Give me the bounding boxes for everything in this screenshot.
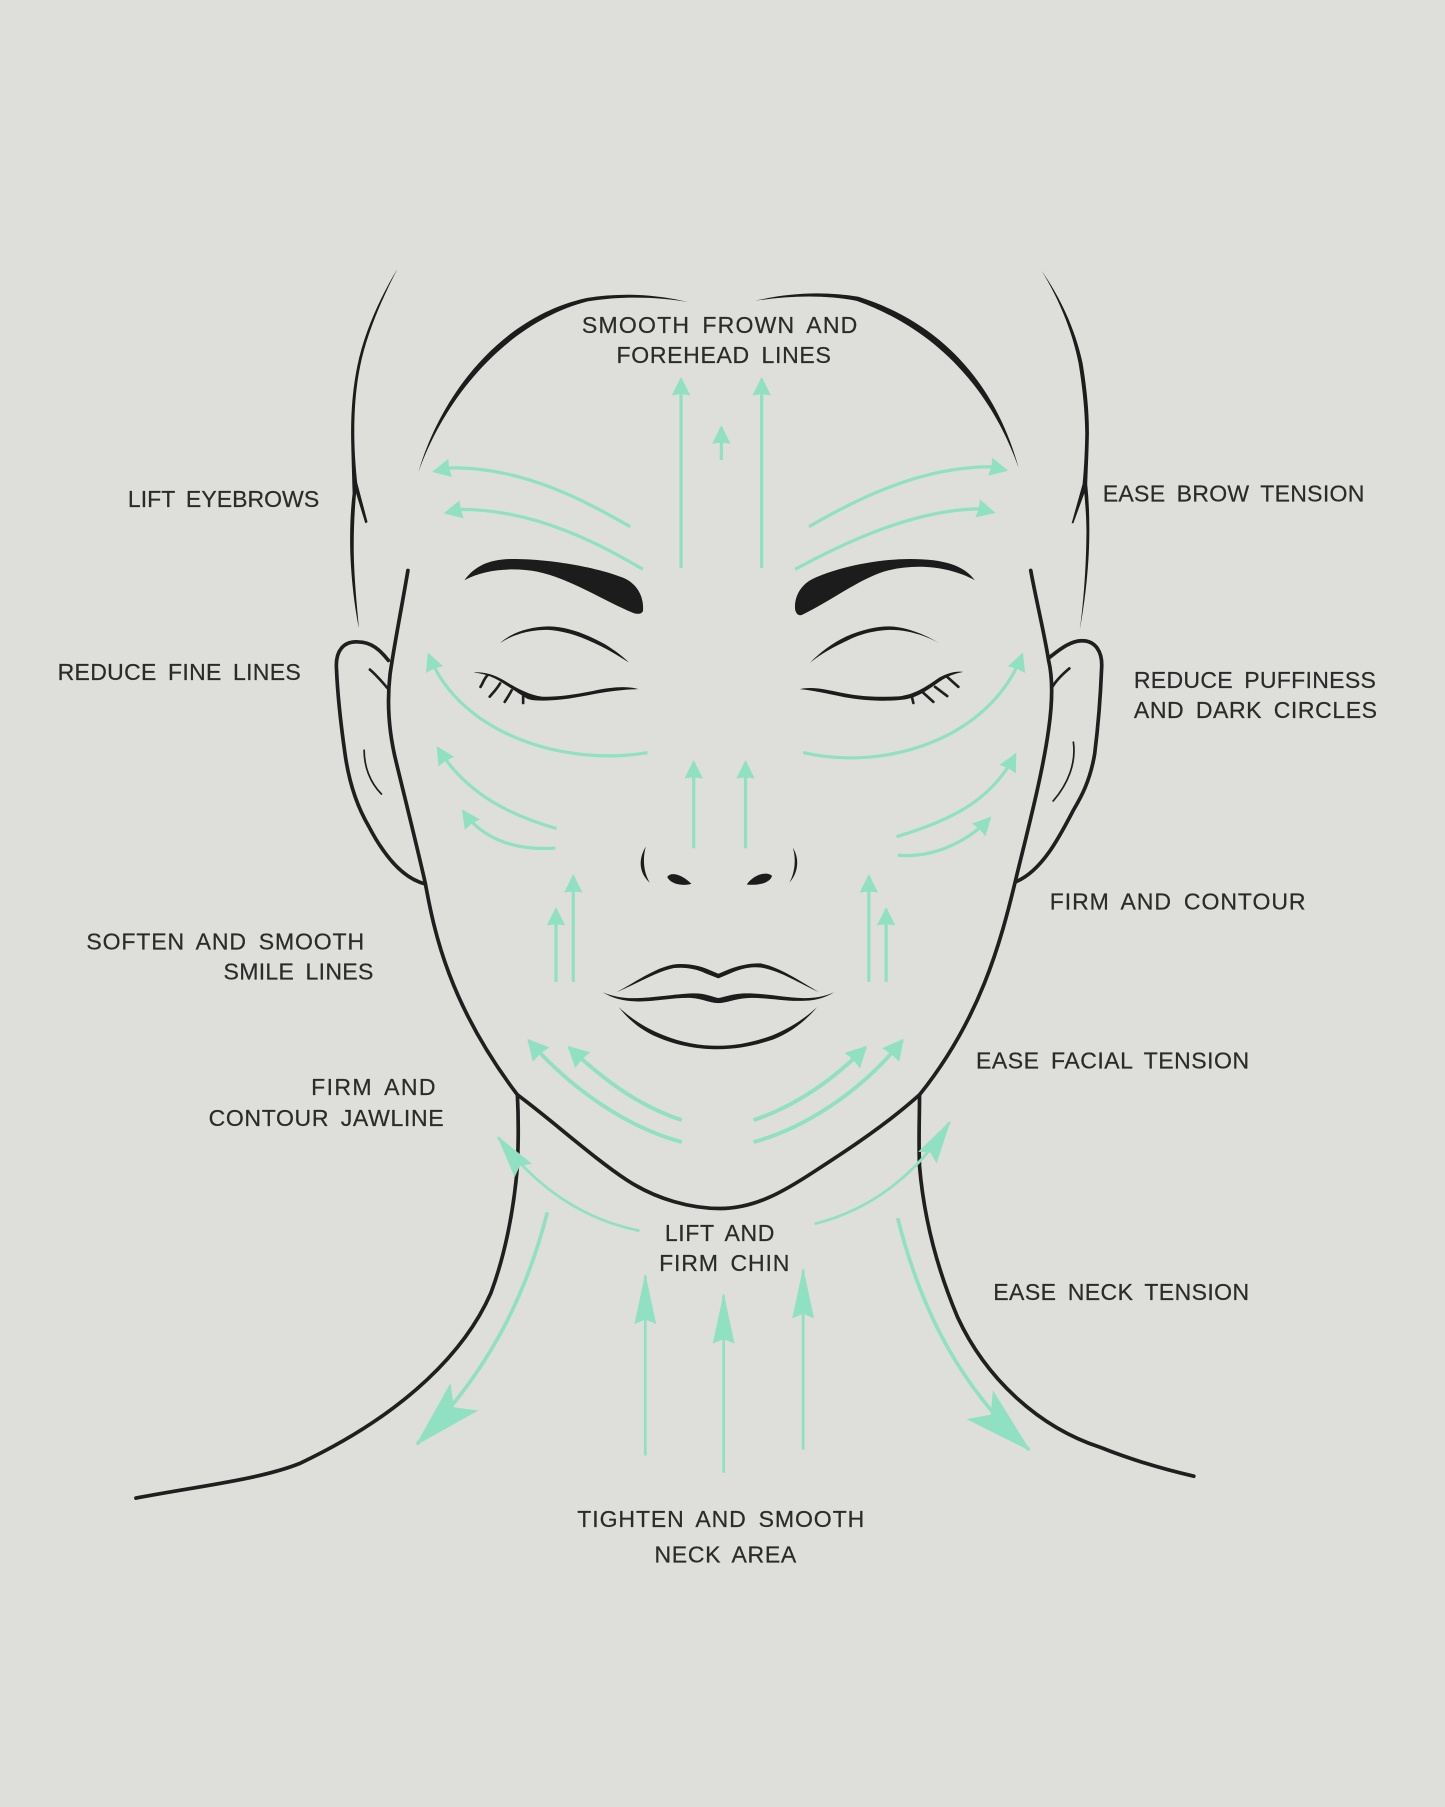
neck side arrow right	[898, 1218, 1029, 1450]
outer hair left	[350, 269, 398, 628]
forehead arrows	[681, 379, 762, 568]
cheek arrows left	[438, 748, 557, 849]
cheek arrows right	[896, 755, 1015, 856]
smile line arrows left	[556, 876, 573, 982]
label: firm and contour: FIRM AND CONTOUR	[1050, 888, 1306, 914]
smile line arrows right	[869, 876, 886, 982]
nostril left	[667, 874, 691, 885]
label: firm and contour jawline	[209, 1074, 444, 1131]
label: soften and smooth smile lines	[86, 929, 373, 985]
eyebrow left	[464, 559, 643, 614]
face line drawing	[136, 269, 1194, 1498]
nose left side	[641, 846, 650, 883]
label: reduce puffiness and dark circles	[1134, 667, 1377, 723]
neck and shoulder left	[136, 1095, 518, 1498]
inner ear left	[364, 750, 381, 794]
outer hair right	[1042, 271, 1089, 630]
chin side arrow left	[498, 1137, 640, 1231]
label: soften and smooth smile lines: SMILE LINES	[224, 959, 373, 985]
ear right	[1016, 641, 1102, 882]
label: smooth frown and forehead lines: SMOOTH FROWN AND	[582, 312, 857, 338]
label: reduce puffiness and dark circles: REDUCE PUFFINESS	[1134, 667, 1376, 693]
nostril right	[747, 874, 772, 885]
ear left	[336, 642, 425, 884]
label: smooth frown and forehead lines: FOREHEAD LINES	[616, 342, 831, 368]
hairline left	[418, 295, 688, 473]
label: firm and contour jawline: FIRM AND	[311, 1074, 436, 1100]
label: soften and smooth smile lines: SOFTEN AND SMOOTH	[86, 929, 364, 955]
labels	[58, 312, 1377, 1568]
label: lift and firm chin	[659, 1220, 789, 1276]
face contour	[389, 570, 1052, 1209]
label: tighten and smooth neck area	[577, 1506, 864, 1568]
neck and shoulder right	[919, 1095, 1194, 1476]
inner ear right	[1053, 742, 1074, 801]
label: firm and contour jawline: CONTOUR JAWLINE	[209, 1105, 444, 1131]
eyebrow right	[795, 559, 975, 615]
label: ease neck tension: EASE NECK TENSION	[993, 1279, 1249, 1305]
label: tighten and smooth neck area: NECK AREA	[655, 1542, 797, 1568]
label: lift and firm chin: LIFT AND	[665, 1220, 774, 1246]
upper lip	[616, 963, 819, 992]
neck upward arrows	[645, 1270, 803, 1473]
inner ear top right	[1052, 668, 1069, 688]
closed eye right	[800, 672, 963, 703]
label: lift and firm chin: FIRM CHIN	[659, 1250, 789, 1276]
label: reduce puffiness and dark circles: AND DARK CIRCLES	[1134, 697, 1377, 723]
chin side arrow right	[815, 1122, 950, 1224]
label: lift eyebrows: LIFT EYEBROWS	[128, 486, 319, 512]
label: ease facial tension: EASE FACIAL TENSION	[976, 1047, 1249, 1073]
nose right side	[789, 848, 797, 883]
nose bridge arrows	[694, 762, 746, 848]
jawline arrows right	[754, 1041, 902, 1142]
massage arrows	[417, 379, 1029, 1473]
label: reduce fine lines: REDUCE FINE LINES	[58, 659, 301, 685]
label: smooth frown and forehead lines	[582, 312, 857, 368]
inner ear top left	[370, 670, 388, 689]
brow arrows right	[795, 467, 1006, 569]
closed eye left	[474, 672, 638, 703]
lower lip	[619, 1007, 817, 1049]
label: tighten and smooth neck area: TIGHTEN AND SMOOTH	[577, 1506, 864, 1532]
lip parting line	[603, 992, 834, 1003]
eyelid crease right	[810, 626, 939, 663]
jawline arrows left	[529, 1041, 682, 1142]
under-eye arrow left	[429, 655, 648, 756]
brow arrows left	[434, 468, 643, 569]
hairline right	[755, 293, 1019, 468]
eyelid crease left	[500, 626, 629, 663]
neck side arrow left	[417, 1212, 547, 1444]
label: ease brow tension: EASE BROW TENSION	[1103, 480, 1364, 506]
under-eye arrow right	[803, 655, 1022, 758]
